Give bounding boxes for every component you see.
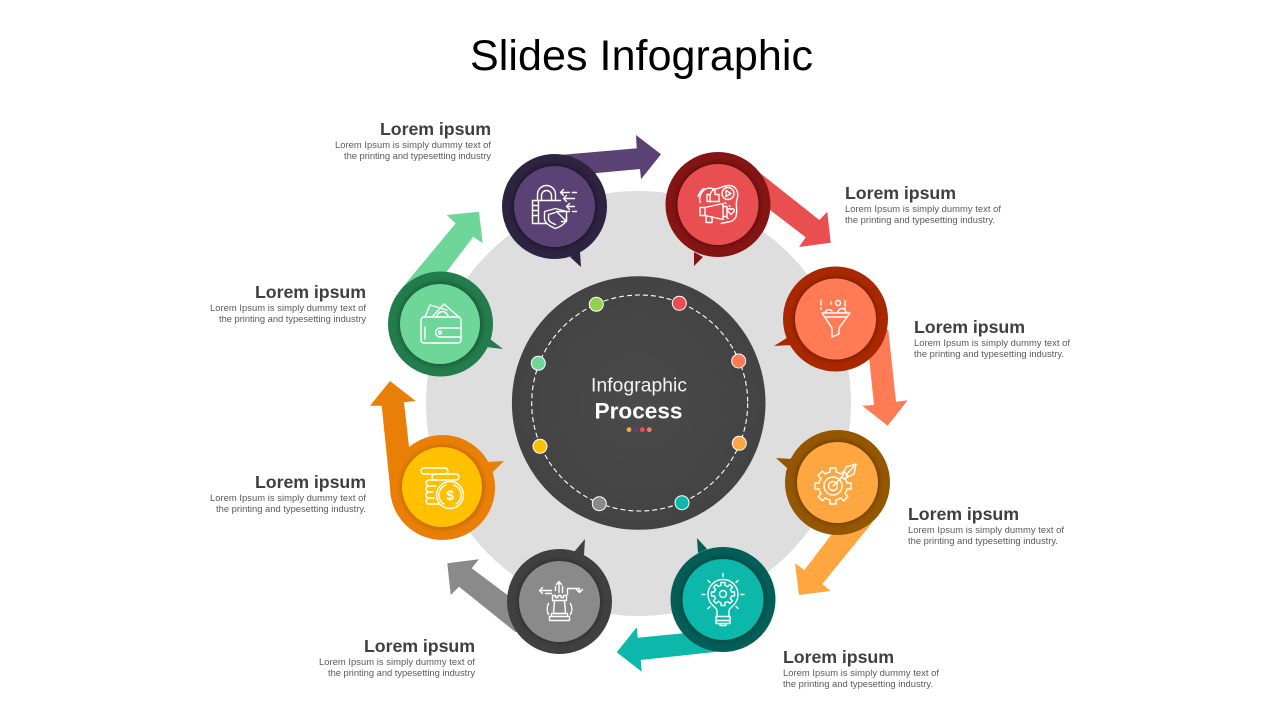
hub heading xyxy=(591,376,687,424)
panel: step teal xyxy=(617,538,939,689)
text: green step xyxy=(210,282,366,324)
text: yellow step: the printing and typesetting industry. xyxy=(216,503,366,514)
icon: lock and shield xyxy=(532,186,576,228)
panel: step red xyxy=(666,152,1001,266)
background circle xyxy=(426,191,851,616)
node: green xyxy=(388,272,503,376)
text: orange step: Lorem Ipsum is simply dummy text of xyxy=(908,524,1064,535)
text: orange step: Lorem ipsum xyxy=(908,504,1019,524)
text: orange step xyxy=(908,504,1064,546)
icon: chess rook with arrows xyxy=(540,582,582,620)
hub heading: Process xyxy=(594,398,682,424)
text: yellow step: Lorem Ipsum is simply dummy text of xyxy=(210,492,366,503)
text: yellow step: Lorem ipsum xyxy=(255,472,366,492)
text: purple step: Lorem ipsum xyxy=(380,119,491,139)
dashed ring with coloured dots xyxy=(531,295,748,511)
text: orange step: the printing and typesetting industry. xyxy=(908,535,1058,546)
icon: megaphone xyxy=(698,186,738,224)
node: purple xyxy=(502,154,607,267)
text: red step: Lorem Ipsum is simply dummy text of xyxy=(845,203,1001,214)
text: grey step: Lorem Ipsum is simply dummy text of xyxy=(319,656,475,667)
panel: step green xyxy=(210,212,503,376)
text: red step: the printing and typesetting industry. xyxy=(845,214,995,225)
panel: step yellow xyxy=(210,381,504,540)
panel: step grey xyxy=(319,539,612,678)
text: green step: the printing and typesetting industry xyxy=(219,313,366,324)
arrow: coral xyxy=(860,330,908,426)
arrow: grey xyxy=(447,559,530,636)
panel: step coral xyxy=(774,266,1070,426)
text: red step: Lorem ipsum xyxy=(845,183,956,203)
arrow: orange xyxy=(795,510,872,595)
arrow: amber xyxy=(370,381,442,487)
icon: coins xyxy=(421,468,464,508)
panel: step purple xyxy=(335,119,661,267)
text: purple step: Lorem Ipsum is simply dummy text of xyxy=(335,139,491,150)
text: teal step xyxy=(783,647,939,689)
panel: step orange xyxy=(776,430,1064,595)
text: grey step: Lorem ipsum xyxy=(364,636,475,656)
text: coral step xyxy=(914,317,1070,359)
arrow: red xyxy=(730,165,831,247)
icon: light bulb with gear xyxy=(702,574,744,626)
icon: wallet xyxy=(421,304,461,343)
text: green step: Lorem Ipsum is simply dummy text of xyxy=(210,302,366,313)
text: green step: Lorem ipsum xyxy=(255,282,366,302)
arrow: purple xyxy=(560,135,661,190)
hub accent dots xyxy=(627,427,652,432)
node: coral xyxy=(774,266,888,372)
icon: gear and target xyxy=(815,464,856,504)
icon: funnel xyxy=(821,300,850,337)
panel: central hub xyxy=(512,276,766,530)
arrow: teal xyxy=(617,620,730,672)
text: teal step: Lorem Ipsum is simply dummy text of xyxy=(783,667,939,678)
text: coral step: the printing and typesetting industry. xyxy=(914,348,1064,359)
node: orange xyxy=(776,430,890,535)
hub heading: Infographic xyxy=(591,376,687,396)
text: purple step: the printing and typesetting industry xyxy=(344,150,491,161)
node: teal xyxy=(670,538,776,652)
text: grey step xyxy=(319,636,475,678)
text: teal step: Lorem ipsum xyxy=(783,647,894,667)
text: coral step: Lorem ipsum xyxy=(914,317,1025,337)
icon: coins: $ xyxy=(446,487,454,503)
node: red xyxy=(666,152,770,266)
text: yellow step xyxy=(210,472,366,514)
text: teal step: the printing and typesetting industry. xyxy=(783,678,933,689)
text: coral step: Lorem Ipsum is simply dummy text of xyxy=(914,337,1070,348)
node: yellow xyxy=(390,435,504,540)
text: grey step: the printing and typesetting industry xyxy=(328,667,475,678)
node: grey xyxy=(507,539,612,654)
arrow: green xyxy=(402,212,483,300)
text: red step xyxy=(845,183,1001,225)
title: Slides Infographic xyxy=(470,32,813,80)
text: purple step xyxy=(335,119,491,161)
